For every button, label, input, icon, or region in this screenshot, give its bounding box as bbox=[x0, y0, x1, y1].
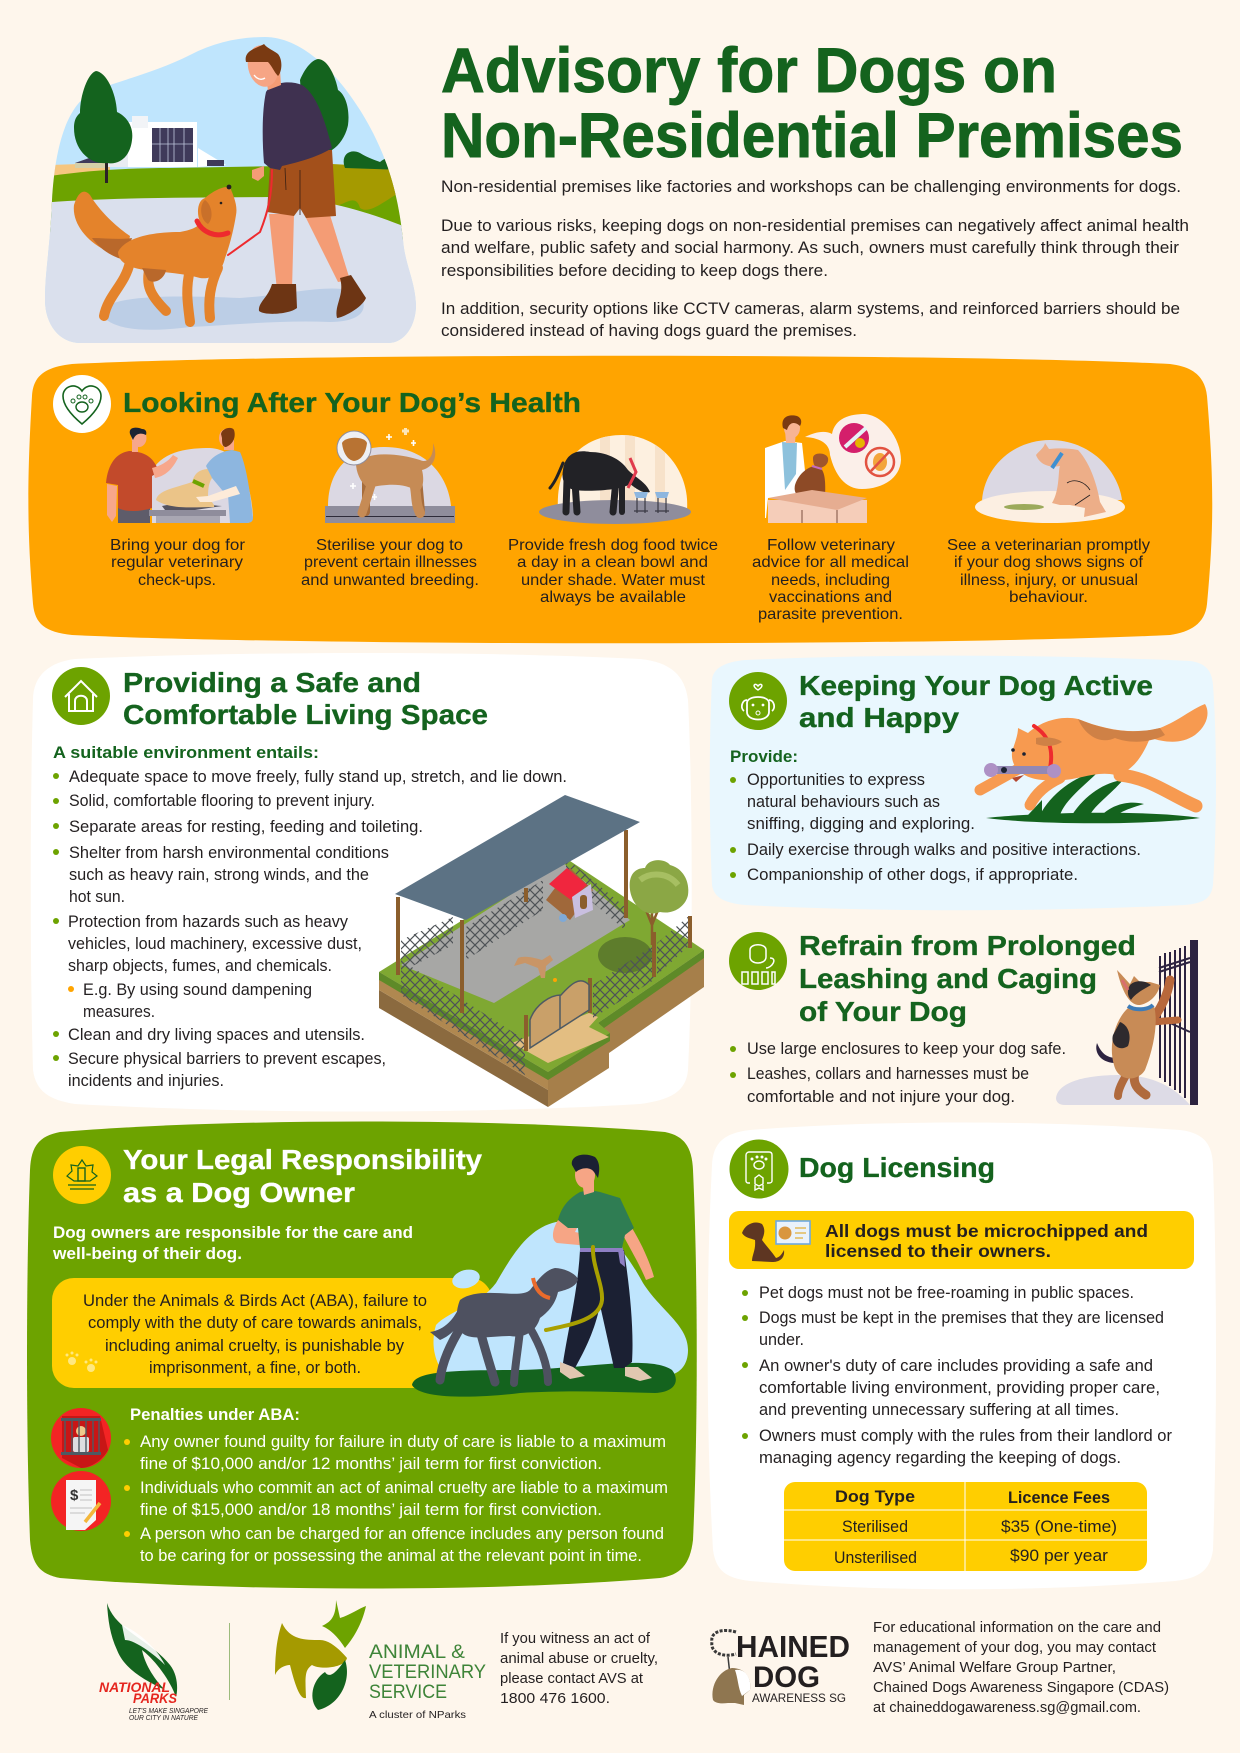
illustration: dog with cone bbox=[325, 428, 455, 523]
illustration: man with dog bbox=[412, 1155, 688, 1397]
contact text: AVS: animal abuse or cruelty, bbox=[500, 1650, 658, 1667]
bullet list: hot sun. bbox=[69, 888, 125, 906]
contact text: AVS: If you witness an act of bbox=[500, 1630, 651, 1647]
logo: Chained Dog Awareness SG bbox=[712, 1629, 850, 1705]
captions: check-ups. bbox=[138, 572, 216, 589]
contact text: CDAS: management of your dog, you may contact bbox=[873, 1639, 1157, 1656]
bullet list: Owners must comply with the rules from their landlord or bbox=[759, 1427, 1172, 1445]
intro text bbox=[441, 178, 1189, 340]
bullet list: Leashes, collars and harnesses must be bbox=[747, 1065, 1029, 1083]
bullet list: natural behaviours such as bbox=[747, 793, 940, 811]
heading: and Happy bbox=[799, 702, 959, 733]
captions: under shade. Water must bbox=[521, 572, 706, 589]
heading: Looking After Your Dog’s Health bbox=[123, 387, 581, 418]
bullet list bbox=[742, 1284, 1172, 1467]
intro text bbox=[52, 1224, 413, 1263]
captions: parasite prevention. bbox=[758, 606, 903, 623]
heading: as a Dog Owner bbox=[123, 1177, 355, 1208]
heading: Dog Licensing bbox=[799, 1152, 995, 1183]
heading: Leashing and Caging bbox=[799, 963, 1097, 994]
bullet list: E.g. By using sound dampening bbox=[83, 981, 312, 999]
captions: Follow veterinary bbox=[767, 537, 895, 554]
penalties text: Individuals who commit an act of animal cruelty are liable to a maximum bbox=[140, 1479, 668, 1497]
illustration: unwell dog bbox=[975, 440, 1125, 523]
logo: Chained Dog Awareness SG: HAINED bbox=[736, 1629, 850, 1664]
captions: always be available bbox=[540, 589, 686, 606]
penalties text: fine of $10,000 and/or 12 months’ jail term for first conviction. bbox=[140, 1455, 602, 1473]
logo: National Parks: OUR CITY IN NATURE bbox=[129, 1715, 198, 1722]
heading bbox=[123, 667, 488, 730]
intro text: well-being of their dog. bbox=[52, 1245, 242, 1263]
heading: Refrain from Prolonged bbox=[799, 930, 1136, 961]
bullet list bbox=[730, 771, 1141, 884]
icon: jail bbox=[51, 1408, 111, 1468]
captions: prevent certain illnesses bbox=[304, 554, 477, 571]
heading: Comfortable Living Space bbox=[123, 699, 488, 730]
bullet list: incidents and injuries. bbox=[68, 1072, 224, 1090]
bullet list: sniffing, digging and exploring. bbox=[747, 815, 975, 833]
table: licence fees: Sterilised bbox=[842, 1518, 908, 1536]
trees bbox=[105, 150, 108, 183]
illustration: running dog with bone bbox=[980, 704, 1208, 823]
subheading: A suitable environment entails: bbox=[53, 743, 319, 762]
callout: Animals and Birds Act: including animal cruelty, is punishable by bbox=[105, 1337, 405, 1355]
captions: needs, including bbox=[771, 572, 890, 589]
table: licence fees bbox=[784, 1482, 1147, 1571]
icon: happy dog bbox=[729, 672, 787, 730]
callout: Animals and Birds Act bbox=[52, 1278, 492, 1388]
penalties text: Penalties under ABA: bbox=[130, 1406, 300, 1424]
bullet list: under. bbox=[759, 1331, 804, 1349]
callout: Animals and Birds Act: imprisonment, a fine, or both. bbox=[149, 1359, 361, 1377]
captions: regular veterinary bbox=[111, 554, 243, 571]
penalties text: A person who can be charged for an offence includes any person found bbox=[140, 1525, 664, 1543]
contact text: CDAS: AVS’ Animal Welfare Group Partner, bbox=[873, 1659, 1116, 1676]
bullet list: Separate areas for resting, feeding and toileting. bbox=[69, 818, 423, 836]
heading bbox=[799, 930, 1136, 1027]
captions: vaccinations and bbox=[769, 589, 892, 606]
captions: if your dog shows signs of bbox=[954, 554, 1144, 571]
captions: Sterilise your dog to bbox=[316, 537, 463, 554]
dog bbox=[74, 192, 130, 258]
intro text: In addition, security options like CCTV cameras, alarm systems, and reinforced barriers should be bbox=[441, 300, 1180, 318]
icon: fine document: $ bbox=[70, 1487, 79, 1504]
man bbox=[269, 214, 294, 290]
logo: National Parks: PARKS bbox=[133, 1690, 178, 1706]
panel: legal responsibility bbox=[27, 1122, 697, 1588]
bullet list bbox=[730, 1040, 1066, 1106]
title: Non-Residential Premises bbox=[441, 101, 1183, 171]
illustration: dog eating from bowls bbox=[539, 430, 691, 524]
panel: dog licensing bbox=[708, 1122, 1216, 1589]
contact text: AVS: please contact AVS at bbox=[500, 1670, 644, 1687]
bullet list: An owner's duty of care includes providing a safe and bbox=[759, 1357, 1153, 1375]
captions: and unwanted breeding. bbox=[301, 572, 479, 589]
intro text: and welfare, public safety and social harmony. As such, owners must carefully think through their bbox=[441, 239, 1180, 257]
icon: fine document bbox=[51, 1471, 111, 1531]
callout: Animals and Birds Act: Under the Animals & Birds Act (ABA), failure to bbox=[83, 1292, 427, 1310]
icon: leashed dog bbox=[729, 932, 787, 990]
intro text: responsibilities before deciding to keep dogs there. bbox=[441, 262, 828, 280]
logo: Animal and Veterinary Service bbox=[275, 1600, 486, 1721]
heading: of Your Dog bbox=[799, 996, 967, 1027]
bullet list: measures. bbox=[83, 1003, 155, 1021]
panel: looking after your dog's health bbox=[28, 356, 1212, 643]
bullet list: Secure physical barriers to prevent escapes, bbox=[68, 1050, 386, 1068]
bullet list: Daily exercise through walks and positive interactions. bbox=[747, 841, 1141, 859]
penalties text: to be caring for or possessing the animal at the relevant point in time. bbox=[140, 1547, 642, 1565]
table: licence fees: Licence Fees bbox=[1008, 1489, 1110, 1507]
icon: dog house bbox=[52, 667, 110, 725]
illustration: vet with advice bubble bbox=[765, 414, 901, 523]
logo: National Parks: LET'S MAKE SINGAPORE bbox=[129, 1708, 208, 1715]
heading bbox=[799, 670, 1153, 733]
captions bbox=[110, 537, 1150, 623]
logo: National Parks bbox=[99, 1603, 208, 1722]
heading: Providing a Safe and bbox=[123, 667, 421, 698]
title: Advisory for Dogs on bbox=[441, 36, 1057, 106]
captions: advice for all medical bbox=[752, 554, 909, 571]
table: licence fees: Unsterilised bbox=[834, 1549, 917, 1567]
callout: microchip and licence: licensed to their owners. bbox=[825, 1241, 1051, 1261]
penalties text: fine of $15,000 and/or 18 months’ jail term for first conviction. bbox=[140, 1501, 602, 1519]
icon: gavel bbox=[53, 1146, 111, 1204]
callout: Animals and Birds Act: comply with the duty of care towards animals, bbox=[88, 1314, 422, 1332]
bullet list: Adequate space to move freely, fully stand up, stretch, and lie down. bbox=[69, 768, 567, 786]
heading bbox=[123, 1144, 482, 1208]
bullet list: sharp objects, fumes, and chemicals. bbox=[68, 957, 332, 975]
captions: Provide fresh dog food twice bbox=[508, 537, 718, 554]
contact text: CDAS bbox=[873, 1619, 1169, 1716]
table: licence fees: $35 (One-time) bbox=[1001, 1518, 1117, 1536]
intro text: Due to various risks, keeping dogs on non-residential premises can negatively affect animal health bbox=[441, 217, 1189, 235]
penalties text: Any owner found guilty for failure in duty of care is liable to a maximum bbox=[140, 1433, 666, 1451]
heading: Keeping Your Dog Active bbox=[799, 670, 1153, 701]
intro text: considered instead of having dogs guard the premises. bbox=[441, 322, 857, 340]
callout: microchip and licence bbox=[729, 1211, 1194, 1269]
logo: Animal and Veterinary Service: ANIMAL & bbox=[369, 1642, 465, 1663]
captions: Bring your dog for bbox=[110, 537, 246, 554]
title bbox=[441, 36, 1183, 171]
bullet list: Solid, comfortable flooring to prevent injury. bbox=[69, 792, 375, 810]
panel: safe and comfortable living space bbox=[31, 653, 704, 1112]
bullet list: Opportunities to express bbox=[747, 771, 925, 789]
bullet list: Shelter from harsh environmental conditions bbox=[69, 844, 389, 862]
captions: a day in a clean bowl and bbox=[517, 554, 708, 571]
penalties text bbox=[124, 1406, 668, 1565]
contact text: CDAS: Chained Dogs Awareness Singapore (CDAS) bbox=[873, 1679, 1169, 1696]
subheading: Provide: bbox=[730, 747, 798, 766]
logo: Animal and Veterinary Service: SERVICE bbox=[369, 1682, 447, 1703]
logo: Animal and Veterinary Service: VETERINARY bbox=[369, 1662, 486, 1683]
bullet list: vehicles, loud machinery, excessive dust, bbox=[68, 935, 362, 953]
contact text: AVS: 1800 476 1600. bbox=[500, 1690, 610, 1707]
logo: Chained Dog Awareness SG: DOG bbox=[753, 1661, 820, 1694]
callout: microchip and licence: All dogs must be microchipped and bbox=[825, 1221, 1148, 1241]
bullet list: comfortable living environment, providing proper care, bbox=[759, 1379, 1160, 1397]
bullet list bbox=[53, 768, 567, 1090]
logo: Animal and Veterinary Service: A cluster of NParks bbox=[369, 1709, 466, 1721]
bullet list: Clean and dry living spaces and utensils. bbox=[68, 1026, 365, 1044]
bullet list: Companionship of other dogs, if appropriate. bbox=[747, 866, 1078, 884]
logo: Chained Dog Awareness SG: AWARENESS SG bbox=[752, 1691, 846, 1705]
logo: National Parks: NATIONAL bbox=[99, 1679, 170, 1695]
illustration: vet check-up bbox=[106, 428, 253, 523]
bullet list: Use large enclosures to keep your dog safe. bbox=[747, 1040, 1066, 1058]
bullet list: Protection from hazards such as heavy bbox=[68, 913, 349, 931]
bullet list: and preventing unnecessary suffering at all times. bbox=[759, 1401, 1119, 1419]
panel: keeping your dog active and happy bbox=[710, 656, 1216, 910]
bullet list: Pet dogs must not be free-roaming in public spaces. bbox=[759, 1284, 1134, 1302]
bullet list: Dogs must be kept in the premises that they are licensed bbox=[759, 1309, 1164, 1327]
icon: licence bbox=[730, 1140, 788, 1198]
intro text: Dog owners are responsible for the care and bbox=[53, 1224, 413, 1242]
illustration: dog at gate bbox=[1056, 940, 1198, 1105]
contact text: CDAS: For educational information on the care and bbox=[873, 1619, 1161, 1636]
bullet list: comfortable and not injure your dog. bbox=[747, 1088, 1015, 1106]
captions: illness, injury, or unusual bbox=[960, 572, 1138, 589]
bullet list: managing agency regarding the keeping of dogs. bbox=[759, 1449, 1121, 1467]
captions: behaviour. bbox=[1009, 589, 1088, 606]
illustration: man walking dog in front of factory bbox=[40, 30, 420, 350]
captions: See a veterinarian promptly bbox=[947, 537, 1150, 554]
contact text: AVS bbox=[500, 1630, 658, 1707]
bullet list: such as heavy rain, strong winds, and the bbox=[69, 866, 369, 884]
heading: Your Legal Responsibility bbox=[123, 1144, 482, 1175]
section: refrain from prolonged leashing and caging bbox=[729, 930, 1198, 1106]
contact text: CDAS: at chaineddogawareness.sg@gmail.com. bbox=[873, 1699, 1141, 1716]
table: licence fees: Dog Type bbox=[835, 1488, 915, 1506]
intro text: Non-residential premises like factories and workshops can be challenging environments for dogs. bbox=[441, 178, 1181, 196]
icon: heart paw bbox=[53, 375, 111, 433]
table: licence fees: $90 per year bbox=[1010, 1547, 1109, 1565]
illustration: isometric dog enclosure bbox=[379, 795, 704, 1107]
